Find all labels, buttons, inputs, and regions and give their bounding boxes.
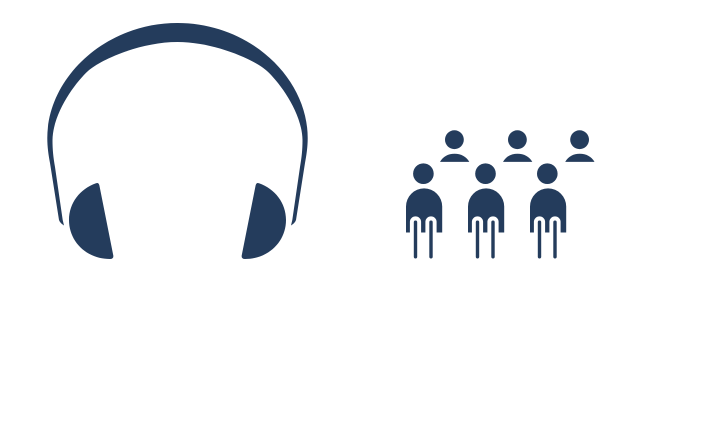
front row person 3 [530,163,566,258]
left ear cup [69,183,113,259]
right ear cup [242,183,286,259]
back row person 1 [440,130,469,162]
icon: headphones [47,23,308,259]
back row person 3 [565,130,594,162]
front row person 2 [468,163,504,258]
icon: audience of people [406,130,594,258]
back row person 2 [503,130,532,162]
headband [47,23,308,226]
front row person 1 [406,163,442,258]
